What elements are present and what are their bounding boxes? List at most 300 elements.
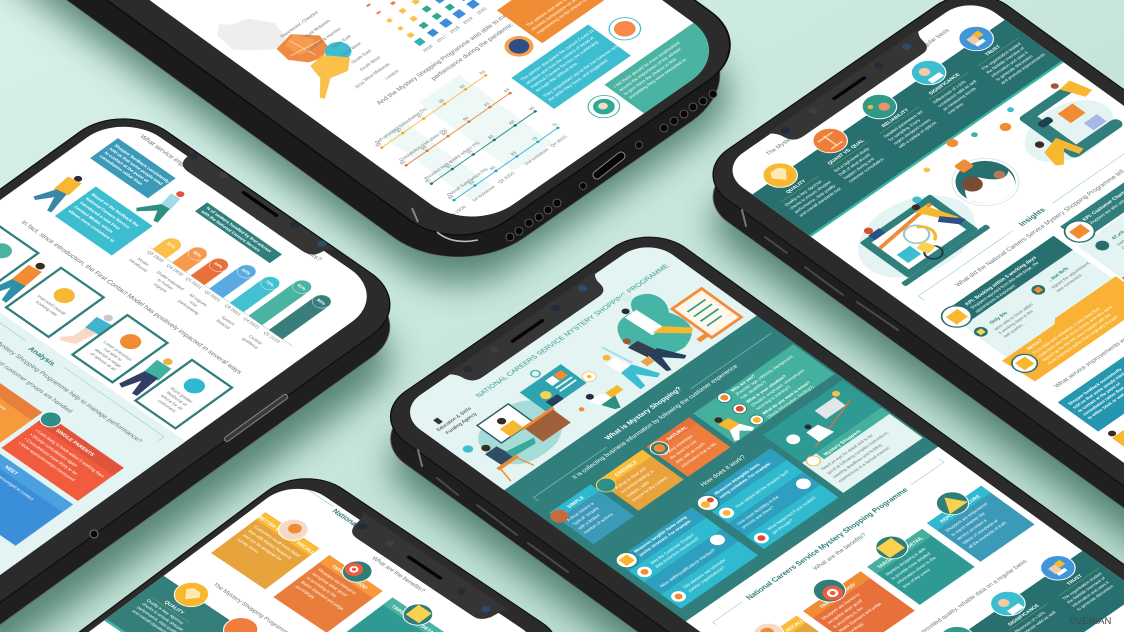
heading: what is mystery shopping: What is Mystery Shopping? xyxy=(604,386,684,441)
bar chart: System xyxy=(220,315,237,327)
bottom phone screen: National Careers Service Mystery Shopping Programme xyxy=(330,507,497,619)
cyan quote box: allows more customers to xyxy=(67,209,116,243)
quality column: performance, data quality xyxy=(793,183,837,214)
card: targets good: is according to the xyxy=(832,606,865,629)
card: targets good: Matrix Standard and judge xyxy=(837,601,883,632)
reliability column: with a variety of options xyxy=(897,121,938,149)
bar chart: Q3 20/21 xyxy=(223,303,243,317)
bar chart: Q4 19/20 xyxy=(166,263,185,277)
line chart: 85 xyxy=(399,159,407,165)
card: simple: A shop mimics a xyxy=(565,501,595,522)
result box: yellow: customers who had more choice and who were xyxy=(1036,304,1114,358)
bar chart: Central xyxy=(247,334,263,345)
line chart: Q2 20/21 xyxy=(497,170,516,184)
KPI panel: customer charter xyxy=(1055,146,1124,301)
section divider xyxy=(708,459,947,625)
phone card: fewer people: Lower proportion xyxy=(102,340,134,362)
band: significance and trust: the fieldsite overview of xyxy=(1066,576,1107,604)
quality column: and overall standards met xyxy=(798,186,843,217)
phone: top, chart screen xyxy=(66,0,731,258)
heading xyxy=(306,485,337,507)
panel: who are you: Who are you? xyxy=(729,373,757,393)
blue quote box: told us that some people tried xyxy=(108,147,164,186)
heat map grid: London xyxy=(384,68,400,80)
heat map grid: West Midlands xyxy=(362,62,391,82)
heat map grid: 2019 xyxy=(462,16,474,25)
line chart: 90 xyxy=(441,130,449,136)
heat map grid: Manchester, Cheshire xyxy=(279,10,320,38)
bar callout: % of seekers handled by first adviser xyxy=(205,206,273,254)
card: simple xyxy=(546,484,634,547)
top phone speaker grilles and port xyxy=(412,90,717,241)
right phone bezel xyxy=(692,0,1124,632)
card: targets good: Matrix Standard and judge xyxy=(300,580,346,611)
panel: tangible items: Measures tangible items using xyxy=(633,515,688,553)
quant vs qual column: QUANT VS. QUAL xyxy=(826,138,866,166)
card: simple: number of actions xyxy=(582,512,614,534)
card: reports failure: Shoppers are empowered xyxy=(944,501,989,533)
card: natural xyxy=(646,417,730,477)
line chart xyxy=(375,70,568,214)
heat map grid: North West xyxy=(340,41,363,57)
card: targets the detail xyxy=(854,520,975,605)
trust column: The organisation trusted xyxy=(980,41,1022,71)
panel: who are you: (Student, employed, unemployed, xyxy=(750,368,806,407)
avatar xyxy=(504,36,534,57)
reliability column: region shopped covers xyxy=(892,118,932,145)
line chart: 99 xyxy=(437,98,446,104)
card: credible: reason for the contact xyxy=(631,475,669,502)
center phone screen xyxy=(389,230,1124,632)
card: targets the detail xyxy=(337,590,459,632)
heading: What service improvements were made following the programme results? xyxy=(138,134,323,263)
line chart: 2nd lockdown xyxy=(523,147,550,166)
panel: who are you: What do you want to know? xyxy=(761,380,812,415)
phone card: fewer people: not able to xyxy=(102,347,124,362)
panel: tangible items: data protection mentioned? xyxy=(654,536,701,569)
heat map grid xyxy=(280,0,486,81)
line chart: 1st lockdown xyxy=(470,184,496,203)
result box: yellow xyxy=(998,276,1124,383)
bar chart: regions xyxy=(153,282,169,294)
copyright: ©VERIAN xyxy=(1069,616,1112,627)
card: targets the detail: to provide more detailed xyxy=(890,551,932,580)
illustration: seated person xyxy=(555,367,635,424)
bottom phone bezel xyxy=(78,478,552,632)
blue quote box: Shopper feedback consistently xyxy=(113,143,171,184)
bar chart: 46% xyxy=(192,250,203,258)
KPI panel: booking: Only 5% xyxy=(988,311,1010,326)
blue box: Shopper feedback consistently xyxy=(1067,367,1123,406)
line chart: Consultation took place (%) xyxy=(398,127,448,162)
heat map grid: South West xyxy=(358,55,382,72)
top phone bezel xyxy=(106,0,731,236)
phone card: booking rate: booking rate xyxy=(35,300,59,317)
cyan speech bubble: The adviser discussed the current Covid-19 xyxy=(519,28,596,82)
significance column: over time xyxy=(946,102,965,115)
panel: mystery shoppers: Mystery Shoppers xyxy=(822,429,863,457)
heading: how does it work: How does it work? xyxy=(699,454,748,488)
line chart: 86 xyxy=(487,134,495,140)
cyan speech bubble: They empathised about the low turnover and xyxy=(542,43,620,98)
band: significance and trust: SIGNIFICANCE xyxy=(1007,603,1042,627)
panel: tangible items: Did advisers use referrals/ xyxy=(682,557,728,589)
panel: who are you: hair, disability?) xyxy=(739,380,768,400)
bottom phone screen xyxy=(88,488,526,632)
phone card: phone call: customers xyxy=(156,398,178,413)
map of regions: 2016 xyxy=(354,80,366,89)
line chart: 90 xyxy=(462,116,470,122)
panel: trend xyxy=(0,383,42,443)
panel: single parents: • More apprenticeships mentioned xyxy=(17,441,77,482)
card: targets good xyxy=(273,546,395,632)
bar chart: Q2 20/21 xyxy=(203,289,222,303)
card: targets good: recognise what 'good' xyxy=(826,598,864,625)
illustration: businessman and doctor with clipboard xyxy=(585,264,745,377)
line chart: 93 xyxy=(478,69,487,75)
card: targets good: TARGETS 'GOOD' xyxy=(329,564,369,591)
result box: yellow: more important rather than originally thought xyxy=(1046,314,1120,365)
cyan speech bubble: the skills they have, and suggested xyxy=(547,58,609,102)
card: credible: not embarrassing: a xyxy=(619,469,655,494)
line chart: 93 xyxy=(420,145,428,151)
band: quality: QUALITY xyxy=(162,600,186,616)
KPI panel: booking: last quarter... xyxy=(1002,321,1026,338)
line chart: 92 xyxy=(458,83,467,89)
cyan quote box: National Careers Service xyxy=(84,197,132,230)
subheading: It is collecting business information by following the customer experience xyxy=(571,363,740,480)
panel: who are you: returning to training?) xyxy=(754,384,792,411)
trust column: TRUST xyxy=(984,44,1002,57)
line chart: Q4 19/20 xyxy=(448,204,468,218)
bar chart: 72% xyxy=(264,280,276,288)
cyan speech bubble: through this difficult time. xyxy=(534,61,580,93)
card: targets good: accordingly xyxy=(294,584,317,600)
panel: intangible items xyxy=(692,448,838,552)
card: natural: the need for role xyxy=(668,439,699,460)
panel: intangible items: Measures intangible items xyxy=(713,462,761,496)
panel: single parents: • Shorter consultations again xyxy=(29,433,79,468)
card: targets good: recognise what 'good' xyxy=(311,572,349,597)
left phone volume button and jack xyxy=(90,397,285,538)
band: significance and trust: to generate discussion xyxy=(1075,584,1115,611)
card: targets good: Shoppers are trained to xyxy=(820,592,862,621)
KPI panel: booking xyxy=(935,235,1117,363)
trust column: to generate discussion xyxy=(995,54,1034,81)
bar chart: now xyxy=(188,300,200,308)
bar chart: Q3 19/20 xyxy=(146,250,166,263)
illustration: video call panel xyxy=(511,358,587,411)
significance column: as measuring trends xyxy=(941,86,977,111)
main title: NATIONAL CAREERS SERVICE MYSTERY SHOPPING PROGRAMME xyxy=(475,263,671,399)
card: simple: "typical" enquiry xyxy=(571,506,601,526)
line chart: 91 xyxy=(482,101,491,107)
bar chart: guidance xyxy=(241,337,260,350)
panel: mystery shoppers xyxy=(763,380,923,493)
phone card: phone call xyxy=(135,360,232,428)
KPI panel: booking: appointment is important xyxy=(974,283,1017,313)
heat map grid: Yorkshire & Humber xyxy=(305,26,343,53)
bar chart: 44% xyxy=(213,261,224,269)
orange speech bubble xyxy=(496,0,604,44)
blue box: to contact at the point of xyxy=(1076,381,1122,413)
KPI panel: booking: Shoppers reported from this web-page, the xyxy=(969,260,1040,310)
line chart: 88 xyxy=(508,119,516,125)
panel: tangible items xyxy=(611,506,758,609)
bar chart: participating xyxy=(177,299,201,316)
panel: who are you: (Parents' age, ethnicity, background, xyxy=(734,354,795,396)
card: simple: with a limited xyxy=(576,513,601,530)
line chart: 84 xyxy=(468,179,476,185)
panel: single parents: • Consultations more likely to be xyxy=(23,437,79,476)
panel: intangible items: How much flexibility in the xyxy=(735,494,780,526)
cyan speech bubble: National Careers Service are continuing xyxy=(529,40,600,89)
line chart: 91 xyxy=(466,148,474,154)
map of regions xyxy=(217,18,365,99)
panel: who are you: What is your situation? xyxy=(745,374,788,404)
blue box xyxy=(1058,348,1124,432)
benefits question: What are the benefits? xyxy=(812,532,869,572)
card: credible: CREDIBLE xyxy=(614,459,640,478)
panel: mystery shoppers: meeting deadlines and holding xyxy=(831,443,884,479)
cyan speech bubble xyxy=(511,24,632,109)
significance column xyxy=(898,50,990,115)
person: yellow jacket xyxy=(34,176,82,212)
KPI panel: booking: ...but 9x% xyxy=(1047,266,1071,283)
illustration: headset agent xyxy=(887,127,1039,234)
card: better level of recall xyxy=(211,504,331,590)
line chart: 83 xyxy=(509,150,518,156)
top phone screen: performance during the pandemic xyxy=(430,22,515,82)
phone card: fewer people: attempt a range xyxy=(93,348,123,368)
heat map grid: 2018 xyxy=(448,25,461,34)
top phone screen xyxy=(150,0,709,216)
left phone notch xyxy=(171,147,337,263)
quant vs qual column: built of what should xyxy=(837,152,872,176)
card: reports failure xyxy=(914,476,1035,562)
logo: Funding Agency xyxy=(444,411,479,436)
line chart: 94 xyxy=(503,87,511,93)
cyan speech bubble: situation and how the careers of those in xyxy=(524,35,596,85)
quant vs qual column: Set a high-level study- xyxy=(832,146,872,173)
card: targets the detail: information closer to the xyxy=(896,555,938,585)
bar chart: 91% xyxy=(296,283,307,291)
analysis divider xyxy=(0,322,164,441)
illustration: laptop xyxy=(835,179,998,294)
green speech bubble xyxy=(604,23,709,114)
panel: single parents xyxy=(0,409,130,501)
card: targets good: TARGETS 'GOOD' xyxy=(818,582,858,610)
card: credible xyxy=(592,450,684,514)
section heading: National Careers Service Mystery Shopping Programme xyxy=(744,486,910,601)
heading divider xyxy=(534,333,776,501)
bar chart: Beta'ed xyxy=(215,319,232,330)
avatar xyxy=(588,95,620,118)
bar callout xyxy=(195,202,282,263)
heat map grid: 2016 xyxy=(421,44,434,53)
KPI panel: booking: KPI: Booking within 5 working days xyxy=(964,255,1038,307)
panel: NEET xyxy=(0,451,73,546)
card: natural: play with as much xyxy=(674,441,707,464)
line chart: 76 xyxy=(530,136,539,142)
panel: tangible items: partner organisations? xyxy=(687,565,726,593)
line chart: Self-arranged consultation (%) xyxy=(374,106,428,145)
card: reports failure: all the moments of truth xyxy=(967,520,1008,549)
result box: yellow: From data and verbatims, it was clear that xyxy=(1031,306,1101,355)
green speech bubble: around the importance of the adviser xyxy=(617,47,683,92)
card: simple: SIMPLE xyxy=(566,495,587,509)
quality column xyxy=(749,151,843,217)
line chart: 90 xyxy=(528,105,536,111)
bar chart: to further xyxy=(156,278,175,291)
card: targets the detail: Mystery shopping is able xyxy=(884,546,927,576)
significance column: Differences of >10% xyxy=(932,79,967,104)
card: natural: information true to life xyxy=(680,441,718,468)
band: significance and trust: The organisation trusted xyxy=(1061,571,1103,601)
phone: right, insights screen xyxy=(692,0,1124,632)
cyan quote box xyxy=(55,186,153,256)
quant vs qual column xyxy=(798,118,890,183)
bar chart: 95% xyxy=(316,298,327,306)
bar chart: introduced xyxy=(128,258,149,273)
line chart: 75 xyxy=(550,122,559,128)
center phone notch xyxy=(447,272,614,388)
significance column: considered valid as well xyxy=(936,79,978,108)
green speech bubble: to give them the chance to find xyxy=(622,57,678,96)
card: targets the detail: TARGETS THE DETAIL xyxy=(876,536,925,570)
card: better level of recall: BETTER LEVEL OF RECALL xyxy=(256,515,316,555)
panel: tangible items: Was the Customer Charter/ xyxy=(649,532,696,565)
card: targets good: Shoppers are trained to xyxy=(317,567,358,596)
person xyxy=(1106,426,1124,447)
heat map grid: South East xyxy=(350,48,373,64)
trust column: and promote improvements xyxy=(999,52,1046,85)
reliability column xyxy=(848,84,940,149)
quality column: checks to ensure shopper xyxy=(788,179,833,210)
bar chart: Model extended xyxy=(155,270,186,291)
panel: intangible items: What happened if you couldn't xyxy=(766,495,818,531)
phone card 0 xyxy=(0,225,40,282)
phone card: booking rate xyxy=(6,268,104,337)
right phone side buttons xyxy=(742,210,898,330)
trust column xyxy=(945,13,1046,85)
illustration: worker in teal xyxy=(592,339,662,389)
trust column: the fieldsite overview of xyxy=(985,46,1026,74)
band: significance and trust: information and uses it xyxy=(1071,580,1111,608)
quant vs qual column: happen during and xyxy=(842,156,876,180)
left phone screen xyxy=(0,126,367,575)
card: natural: NATURAL xyxy=(665,425,690,442)
card: reports failure: failure of standards at xyxy=(961,518,1000,545)
bar chart: Q1 21/22 xyxy=(263,331,282,344)
card: reports failure: REPORTS FAILURE xyxy=(939,494,983,524)
panel: mystery shoppers: Need an eye for detail and to be xyxy=(820,433,875,471)
right phone notch xyxy=(767,29,938,148)
right phone side wall xyxy=(692,2,1124,632)
line chart: 91 xyxy=(445,163,453,169)
person: red hair xyxy=(136,191,184,222)
logo: Education & Skills xyxy=(436,406,474,433)
panel: intangible items: How valued did the enquirer feel? xyxy=(734,469,791,508)
line chart: 97 xyxy=(395,127,404,133)
phone: center, main programme screen xyxy=(370,222,1124,632)
phone card: phone call: likelihood of xyxy=(165,390,189,407)
logo xyxy=(428,401,480,437)
phone card: phone call: advice for all xyxy=(160,394,184,411)
phone card: booking rate: Improved overall xyxy=(36,294,67,316)
result box: yellow: RESULT xyxy=(1026,338,1044,351)
illustration: desk scene xyxy=(452,390,585,483)
panel: intangible items: process was there? xyxy=(740,505,775,529)
card: better level of recall: survey forms xyxy=(236,537,260,554)
avatar xyxy=(608,17,642,40)
line chart: 95 xyxy=(424,178,432,184)
KPI panel: booking: signed the appointment xyxy=(1050,261,1091,289)
band: significance and trust: TRUST xyxy=(1066,574,1084,587)
phone: bottom, benefits screen xyxy=(78,478,552,632)
analysis heading: Analysis xyxy=(26,346,57,367)
blue quote box xyxy=(90,138,176,198)
center phone side buttons xyxy=(418,450,568,572)
card: better level of recall: than with Market Research xyxy=(247,529,294,560)
KPI panel: booking: were able to book within xyxy=(992,302,1035,331)
line chart: 84 xyxy=(447,194,455,200)
top phone side wall xyxy=(0,0,758,284)
line chart: 93 xyxy=(374,142,383,148)
green speech bubble: I felt there should be more emphasised xyxy=(612,40,681,88)
panel: intangible items: using verbatims. For example: xyxy=(718,461,773,499)
panel: single parents: • Less likely to book within 5 working days xyxy=(34,428,107,479)
KPI panel: booking: 5 working days in the xyxy=(997,309,1035,335)
phone card: fewer people: of options at all xyxy=(89,351,117,371)
card: better level of recall xyxy=(731,607,851,632)
panel: mystery shoppers: good at following complex instructions, xyxy=(826,430,890,475)
card: reports failure: service provides a xyxy=(955,518,988,541)
insights heading: Insights xyxy=(1017,206,1047,228)
cyan quote box: Based on the feedback the xyxy=(90,192,141,228)
quality column: QUALITY xyxy=(785,179,808,195)
phone: left, results screen xyxy=(0,118,390,625)
cyan quote box: Contact Model, which xyxy=(73,205,115,234)
card: credible: A shop is clear and xyxy=(614,466,648,490)
trust column: information and uses it xyxy=(990,50,1030,78)
card: better level of recall: Customers recall more detail xyxy=(253,525,302,558)
panel: tangible items: Were skills/qualifications checked? xyxy=(658,547,717,588)
band: quality: Quality is key: rigorous xyxy=(145,598,185,625)
band: significance and trust xyxy=(814,538,1124,632)
band: five qualities xyxy=(736,6,1070,239)
heat map grid: 2017 xyxy=(435,34,448,43)
result box: yellow: signed up for the KPI were happier with the xyxy=(1041,312,1113,362)
phone card: phone call: Much greater xyxy=(169,386,195,404)
line chart: 83 xyxy=(488,165,497,171)
KPI panel: booking: was convenient xyxy=(1055,273,1084,293)
intro sentence: In fact, since introduction, the First Contact Model has positively impacted in several ways xyxy=(19,220,244,376)
bar chart: Q1 20/21 xyxy=(184,276,204,290)
insights divider xyxy=(918,133,1124,300)
panel: tangible items: yes/no structure. For example: xyxy=(637,518,693,557)
bar chart xyxy=(128,238,332,349)
person xyxy=(119,358,173,396)
right phone screen xyxy=(712,0,1124,632)
reliability column: Detailed parameters set xyxy=(882,109,924,138)
left phone side wall xyxy=(0,123,415,632)
band: quality xyxy=(96,561,446,632)
card: targets the detail: time of the event xyxy=(901,567,932,589)
blue quote box: to contact at the point of xyxy=(103,151,150,183)
card: better level of recall: and can be designed for xyxy=(242,533,284,562)
bar chart: Q4 20/21 xyxy=(242,316,262,330)
